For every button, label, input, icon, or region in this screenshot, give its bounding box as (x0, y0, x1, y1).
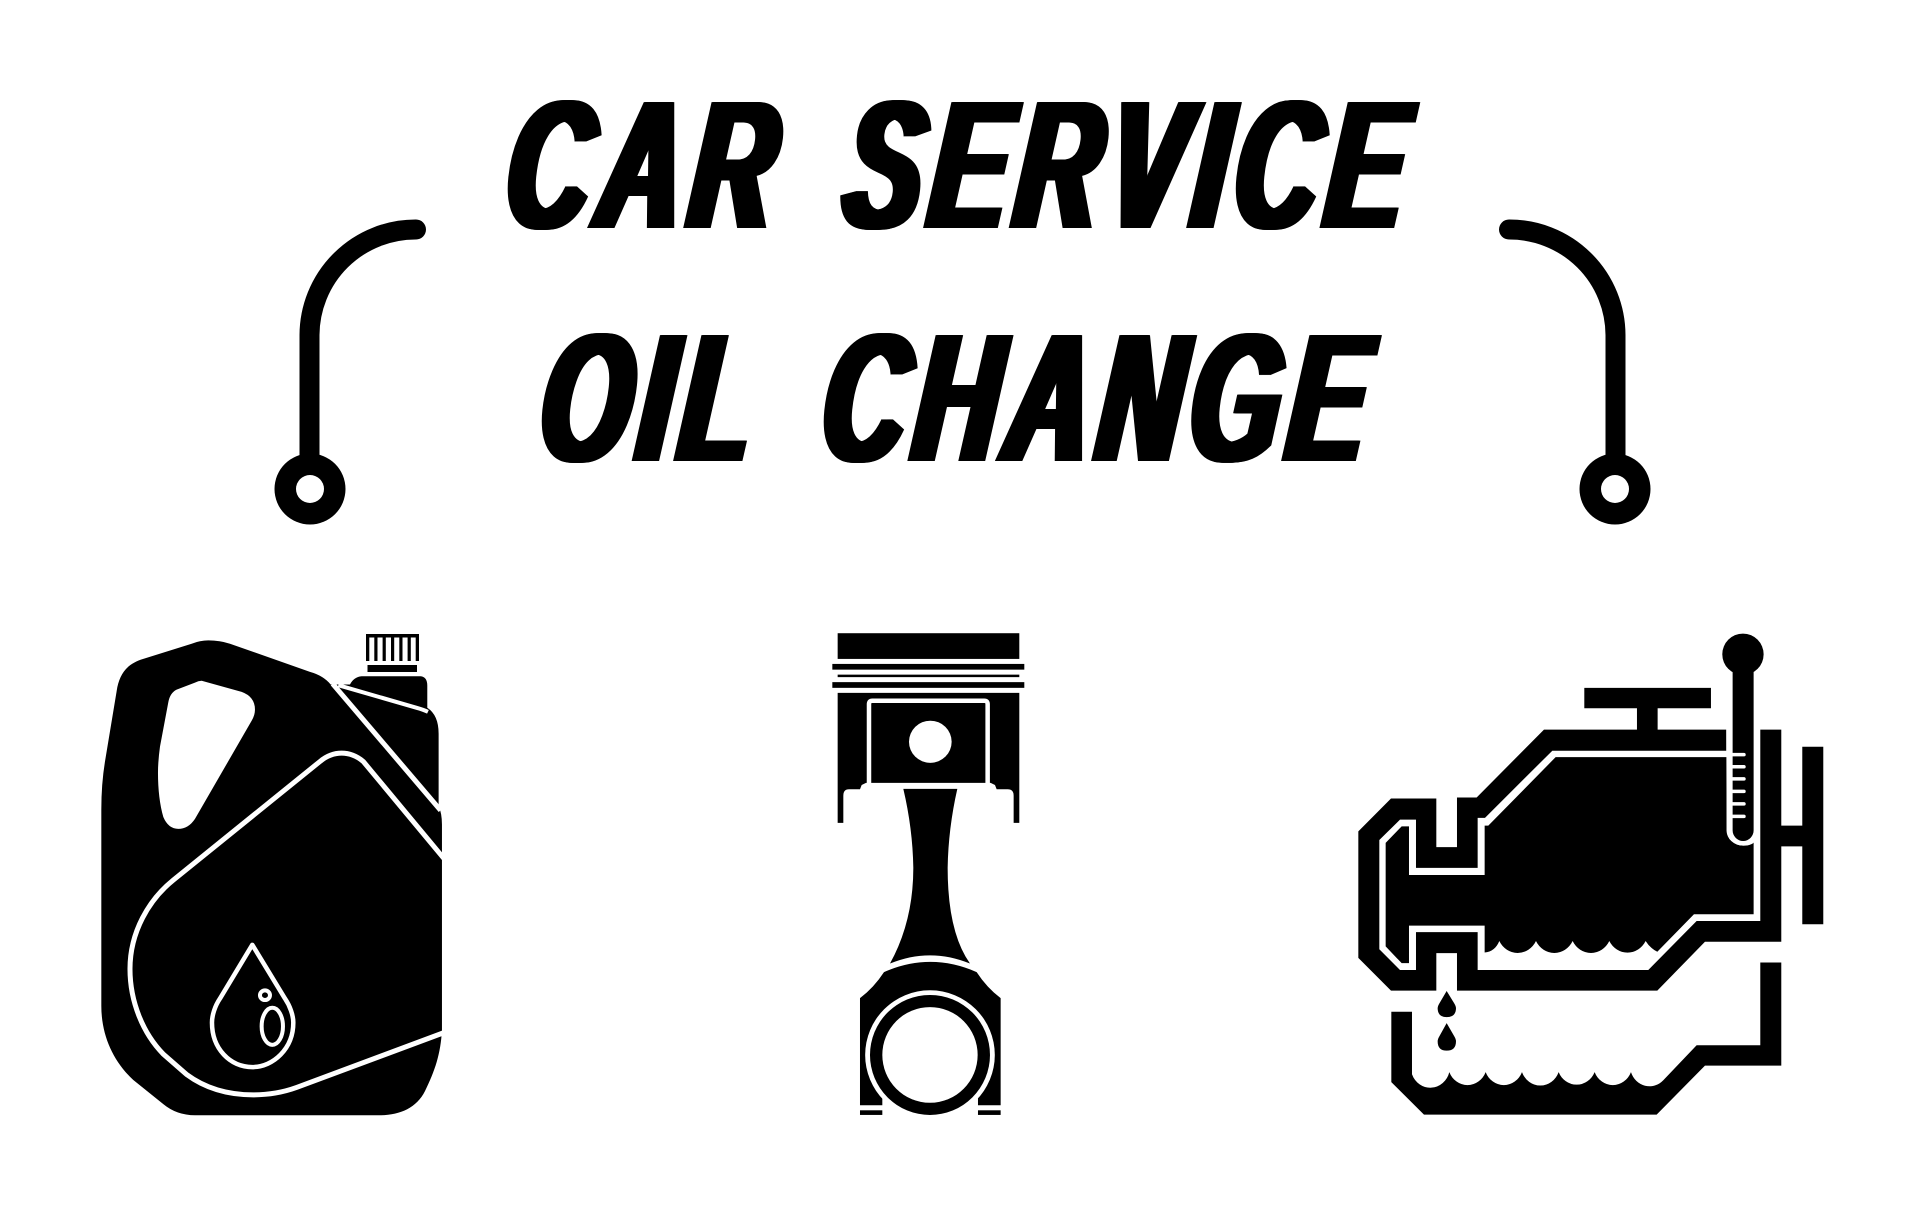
piston skirt (838, 693, 1019, 823)
canister body (101, 640, 444, 1115)
left bracket with ring end (274, 229, 416, 524)
big end (860, 962, 1001, 1120)
piston crown and rings (832, 633, 1024, 688)
icon: oil canister (101, 634, 444, 1115)
canister cap (366, 634, 419, 672)
right bracket with ring end (1509, 229, 1650, 524)
title word: change: CHANGE (814, 295, 1387, 500)
title (498, 62, 1426, 500)
icon: engine oil level (1358, 634, 1823, 1115)
oil pan (1391, 962, 1781, 1115)
title word: car: CAR (498, 62, 796, 267)
label outline (130, 753, 444, 1095)
title word: service: SERVICE (836, 62, 1426, 267)
engine housing (1358, 688, 1823, 991)
engine block (1386, 757, 1754, 963)
dipstick (1722, 634, 1764, 846)
icon: piston and connecting rod (832, 633, 1024, 1120)
oil drops (1438, 991, 1456, 1051)
oil drop (212, 945, 293, 1067)
title word: oil: OIL (532, 295, 773, 500)
connecting rod (890, 789, 970, 964)
